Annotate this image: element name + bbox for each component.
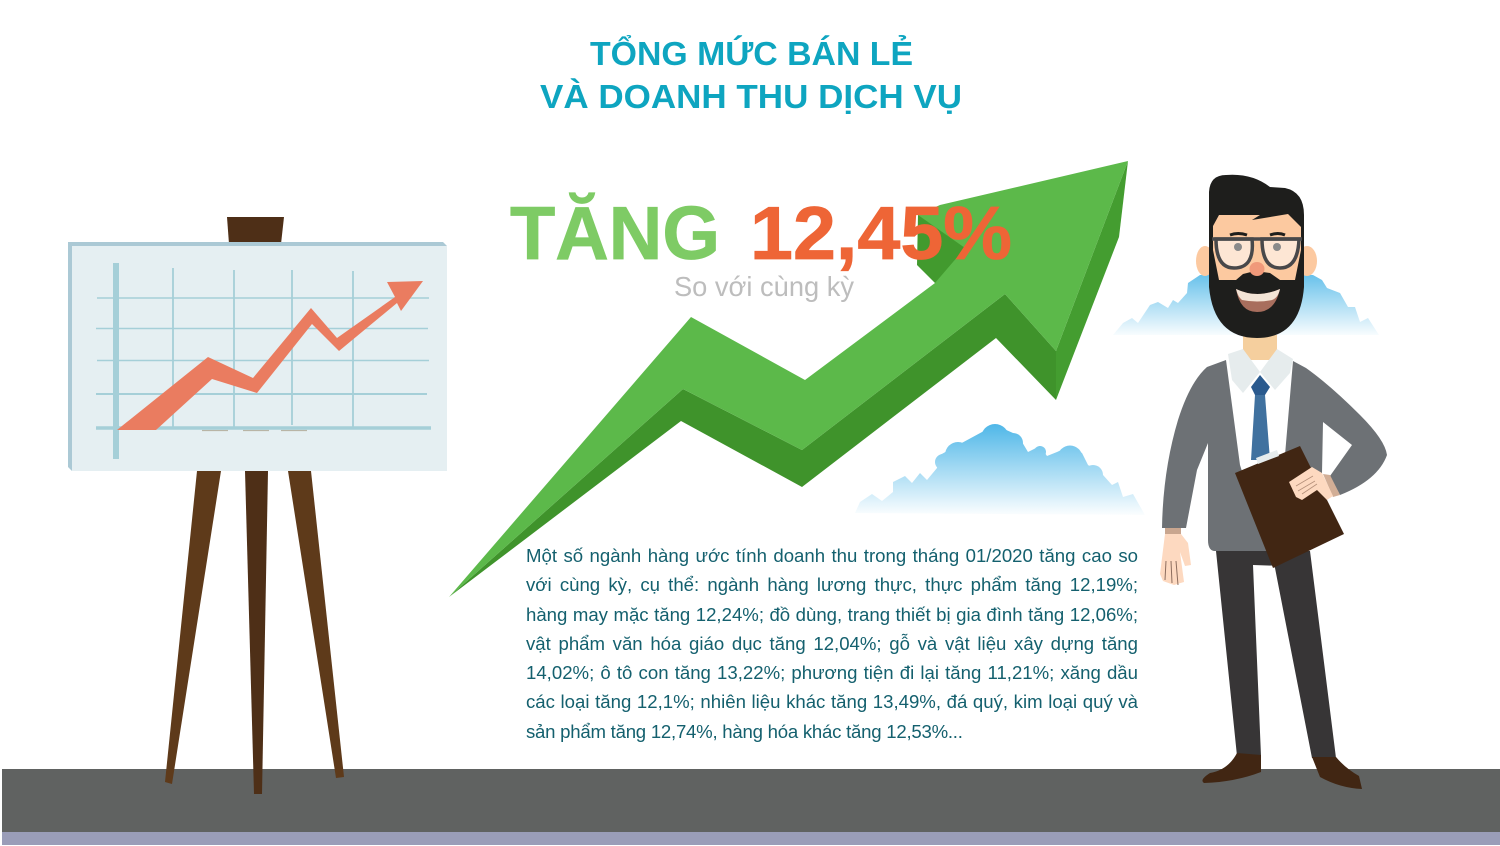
body text paragraph xyxy=(526,545,1138,742)
hair and beard xyxy=(1209,175,1304,338)
easel top clip xyxy=(227,217,284,244)
clipboard xyxy=(1235,446,1344,568)
large green arrow xyxy=(449,161,1128,597)
cloud lower center xyxy=(855,424,1145,515)
headline: TĂNG 12,45% xyxy=(510,191,1012,275)
tie xyxy=(1251,395,1270,460)
body text paragraph: 14,02%; ô tô con tăng 13,22%; phương tiện đi lại tăng 11,21%; xăng dầu xyxy=(526,662,1138,683)
title: VÀ DOANH THU DỊCH VỤ xyxy=(540,78,962,116)
neck xyxy=(1243,335,1277,372)
chart board xyxy=(68,242,447,471)
body text paragraph: sản phẩm tăng 12,74%, hàng hóa khác tăng 12,53%... xyxy=(526,721,963,742)
grid lines xyxy=(96,263,431,459)
headline: TĂNG 12,45%: TĂNG xyxy=(510,191,720,275)
axis tick marks xyxy=(202,430,307,432)
jacket xyxy=(1162,360,1270,560)
right hand xyxy=(1289,467,1340,500)
ears xyxy=(1196,246,1317,276)
eyebrows xyxy=(1230,234,1285,235)
body text paragraph: hàng may mặc tăng 12,24%; đồ dùng, trang thiết bị gia đình tăng 12,06%; xyxy=(526,604,1138,625)
presenter figure xyxy=(1160,175,1387,789)
subtitle: So với cùng kỳ xyxy=(674,271,854,302)
easel legs xyxy=(165,471,344,794)
face xyxy=(1213,214,1301,280)
trousers xyxy=(1216,551,1336,758)
shirt xyxy=(1226,360,1293,460)
left hand xyxy=(1160,528,1191,585)
title xyxy=(540,35,962,116)
body text paragraph: vật phẩm văn hóa giáo dục tăng 12,04%; gỗ và vật liệu xây dựng tăng xyxy=(526,633,1138,654)
mouth xyxy=(1236,289,1280,312)
nose xyxy=(1250,262,1264,276)
cloud behind presenter xyxy=(1113,272,1379,335)
glasses xyxy=(1212,239,1302,268)
title: TỔNG MỨC BÁN LẺ xyxy=(590,35,913,73)
ground band xyxy=(2,769,1500,845)
body text paragraph: với cùng kỳ, cụ thể: ngành hàng lương thực, thực phẩm tăng 12,19%; xyxy=(526,574,1138,595)
collar xyxy=(1228,349,1293,393)
shoes xyxy=(1202,753,1362,789)
body text paragraph: các loại tăng 12,1%; nhiên liệu khác tăng 13,49%, đá quý, kim loại quý và xyxy=(526,691,1138,712)
body text paragraph: Một số ngành hàng ước tính doanh thu trong tháng 01/2020 tăng cao so xyxy=(526,545,1138,566)
chart arrow xyxy=(117,281,423,430)
headline: TĂNG 12,45%: 12,45% xyxy=(750,191,1012,275)
